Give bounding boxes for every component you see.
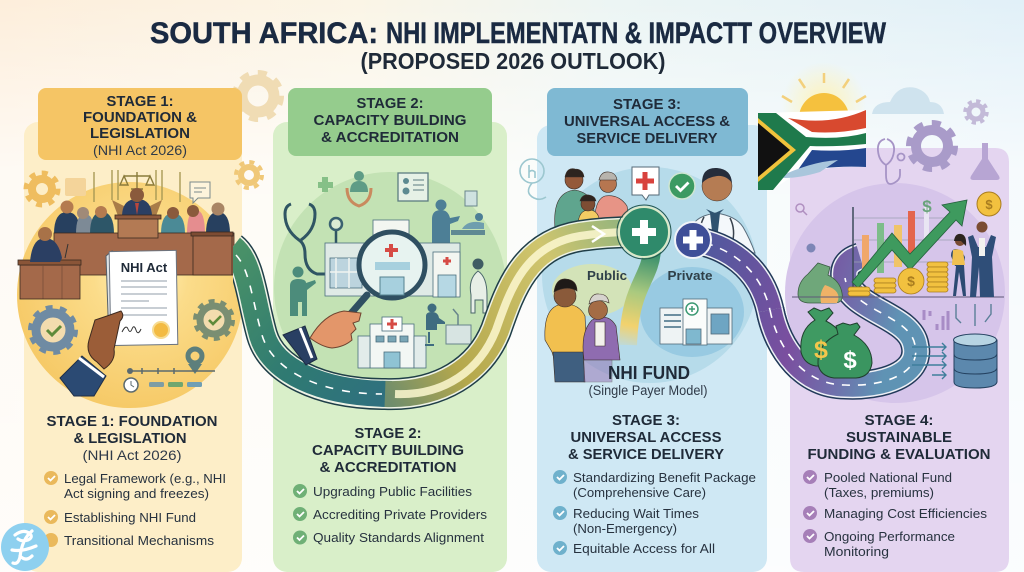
icon: plus: [318, 177, 333, 192]
stage 1 bullets: Act signing and freezes): [64, 486, 209, 501]
stage 2 bullets: [293, 484, 488, 545]
courtroom: judge: [112, 188, 162, 217]
icon: h stethoscope: [520, 159, 546, 199]
stage 1 heading: (NHI Act 2026): [82, 448, 182, 463]
icon: scales of justice: [94, 170, 180, 202]
panel: stage 2: [273, 88, 507, 572]
subtitle: (PROPOSED 2026 OUTLOOK): [360, 48, 666, 74]
NHI fund label: [588, 363, 708, 398]
stage 2 heading: STAGE 2:: [354, 426, 422, 442]
stage 4 bullets: Ongoing Performance: [824, 529, 955, 544]
icon: speech bubble: [190, 182, 210, 203]
icon: stethoscope lavender: [878, 139, 904, 184]
stage 3 bullets: (Comprehensive Care): [573, 485, 706, 500]
icon: note square: [65, 178, 86, 196]
bar chart: $: [922, 197, 932, 216]
stage 4 bullets: Pooled National Fund: [824, 470, 952, 485]
stage 2 bullets: Quality Standards Alignment: [313, 530, 484, 545]
stage 2 heading: & ACCREDITATION: [320, 460, 456, 476]
icon: gear large: [909, 123, 955, 169]
stage 1 bullets: [44, 471, 226, 548]
label: private: Private: [668, 268, 712, 283]
stage 3 heading: UNIVERSAL ACCESS: [570, 430, 722, 446]
stage 1 heading: STAGE 1: FOUNDATION: [46, 414, 218, 430]
stage 4 bullets: Managing Cost Efficiencies: [824, 506, 988, 521]
stage 1 bullets: Legal Framework (e.g., NHI: [64, 471, 226, 486]
courtroom: benches and podium: [18, 215, 234, 299]
dollar symbols on bags: $: [814, 336, 828, 364]
panel: stage 1: [17, 88, 262, 572]
header card: stage 2: CAPACITY BUILDING: [314, 113, 466, 129]
header card: stage 1: LEGISLATION: [90, 126, 190, 142]
decorative gear behind stage 1 header: [235, 73, 281, 119]
title: SOUTH AFRICA:: [150, 17, 378, 50]
road: private to stage 4: [693, 240, 845, 385]
dollar coin text: $: [907, 273, 915, 289]
person with tablet left: [290, 266, 316, 316]
small bars: [924, 310, 948, 330]
stage 2 heading: [312, 426, 464, 476]
stage 4 bullets: [803, 470, 988, 559]
dollar symbols on bags: [814, 336, 857, 374]
hospital main: [325, 220, 460, 297]
title: NHI IMPLEMENTATN & IMPACTT OVERVIEW: [386, 17, 887, 50]
stage 3 bullets: Standardizing Benefit Package: [573, 470, 756, 485]
woman figure: [951, 234, 966, 296]
illustration circle: legislation: [17, 182, 243, 408]
man holding coin: [968, 192, 1001, 297]
header card: stage 1: (NHI Act 2026): [93, 143, 187, 158]
hand holding magnifier: [283, 295, 367, 365]
illustration circle: capacity: [274, 172, 506, 404]
icon: stethoscope: [285, 204, 342, 274]
stage 4 heading: FUNDING & EVALUATION: [808, 447, 990, 463]
stage 1 bullets: Transitional Mechanisms: [64, 533, 215, 548]
person treating patient: [432, 191, 485, 244]
icon: gear top left: [26, 173, 58, 205]
stage 3 heading: STAGE 3:: [612, 413, 680, 429]
icon: profile card: [398, 173, 428, 201]
courtroom: people right: [161, 202, 230, 234]
header card: stage 1: STAGE 1:: [106, 94, 174, 110]
stage 3 bullets: (Non-Emergency): [573, 521, 677, 536]
dollar symbols on bags: $: [843, 347, 857, 374]
header card: stage 3: STAGE 3:: [613, 97, 681, 113]
couple: [545, 279, 620, 382]
NHI fund label: NHI FUND: [608, 363, 690, 383]
node: public plus: [617, 205, 671, 259]
hand holding document: [60, 311, 123, 396]
money bags front: [801, 308, 872, 378]
label: public: Public: [587, 268, 627, 283]
header card: stage 1: [38, 88, 242, 160]
public area blob: [552, 264, 632, 316]
stage 4 bullets: Monitoring: [824, 544, 889, 559]
stage 3 heading: [568, 413, 724, 463]
icon: check gear left: [30, 307, 76, 353]
icon: red cross bubble: [632, 167, 659, 200]
header card: stage 2: [288, 88, 492, 156]
logo badge: [1, 523, 49, 571]
icon: database: [954, 334, 997, 388]
icon: flask: [970, 143, 1000, 180]
flow arrows into database: [912, 304, 991, 379]
stage 4 heading: STAGE 4:: [864, 413, 934, 429]
header card: stage 3: [547, 88, 748, 156]
stage 2 bullets: Upgrading Public Facilities: [313, 484, 473, 499]
node: private plus: [675, 222, 711, 258]
bar chart: [853, 197, 964, 287]
header card: stage 2: & ACCREDITATION: [321, 130, 459, 146]
private area blob: [640, 267, 744, 357]
cloud: [872, 87, 944, 114]
header card: stage 3: UNIVERSAL ACCESS &: [564, 114, 731, 130]
stage 3 bullets: [553, 470, 756, 556]
doctor right: [470, 258, 487, 313]
panel: stage 4: [770, 101, 1009, 572]
NHI fund label: (Single Payer Model): [588, 383, 708, 398]
header card: stage 1: FOUNDATION &: [83, 110, 198, 126]
header card: stage 2: STAGE 2:: [356, 96, 424, 112]
doctor: [691, 168, 755, 253]
road part over panel: [770, 257, 916, 385]
icon: green check: [669, 173, 695, 199]
icon: location pin gear: [188, 349, 202, 374]
stage 3 bullets: Equitable Access for All: [573, 541, 715, 556]
stage 3 bullets: Reducing Wait Times: [573, 506, 700, 521]
stage 3 heading: & SERVICE DELIVERY: [568, 447, 724, 463]
private hospital: [660, 299, 732, 345]
panel: stage 3: [232, 88, 845, 572]
stage 1 heading: [46, 414, 218, 463]
icon: caring hands: [347, 171, 371, 206]
hospital small: [358, 317, 426, 368]
icon: gear small: [965, 101, 987, 123]
icon: magnifier small: [796, 204, 807, 215]
icon: check gear right: [195, 301, 233, 339]
courtroom: people left: [54, 200, 114, 234]
road branch: public: [628, 250, 652, 345]
illustration circle: funding: [785, 183, 1005, 403]
illustration circle: universal access: [542, 167, 758, 383]
stage 1 bullets: Establishing NHI Fund: [64, 510, 196, 525]
icon: gear top right: [236, 162, 262, 188]
family group: [555, 169, 631, 236]
person at desk: [425, 304, 471, 345]
header card: stage 3: SERVICE DELIVERY: [576, 131, 718, 147]
timeline with clock: [124, 368, 215, 392]
flag: South Africa: [758, 110, 866, 190]
document: NHI Act: [106, 250, 178, 346]
ground line: [792, 296, 1004, 298]
growth arrow: [852, 200, 967, 288]
stage 2 heading: CAPACITY BUILDING: [312, 443, 464, 459]
stage 1 heading: & LEGISLATION: [74, 431, 186, 447]
courtroom: lawyer at desk: [30, 227, 68, 262]
money bag back: [798, 244, 842, 303]
document: NHI Act: NHI Act: [121, 260, 168, 275]
stage 2 bullets: Accrediting Private Providers: [313, 507, 488, 522]
title: [150, 17, 887, 50]
sun with rays: [782, 62, 866, 146]
road: stage 1 to 3: [232, 226, 640, 394]
magnifier with hospital: [359, 232, 425, 298]
stage 4 bullets: (Taxes, premiums): [824, 485, 934, 500]
coin dollar text: $: [985, 197, 993, 212]
stage 4 heading: SUSTAINABLE: [846, 430, 952, 446]
stage 4 heading: [808, 413, 990, 463]
coin stacks: [848, 262, 948, 296]
